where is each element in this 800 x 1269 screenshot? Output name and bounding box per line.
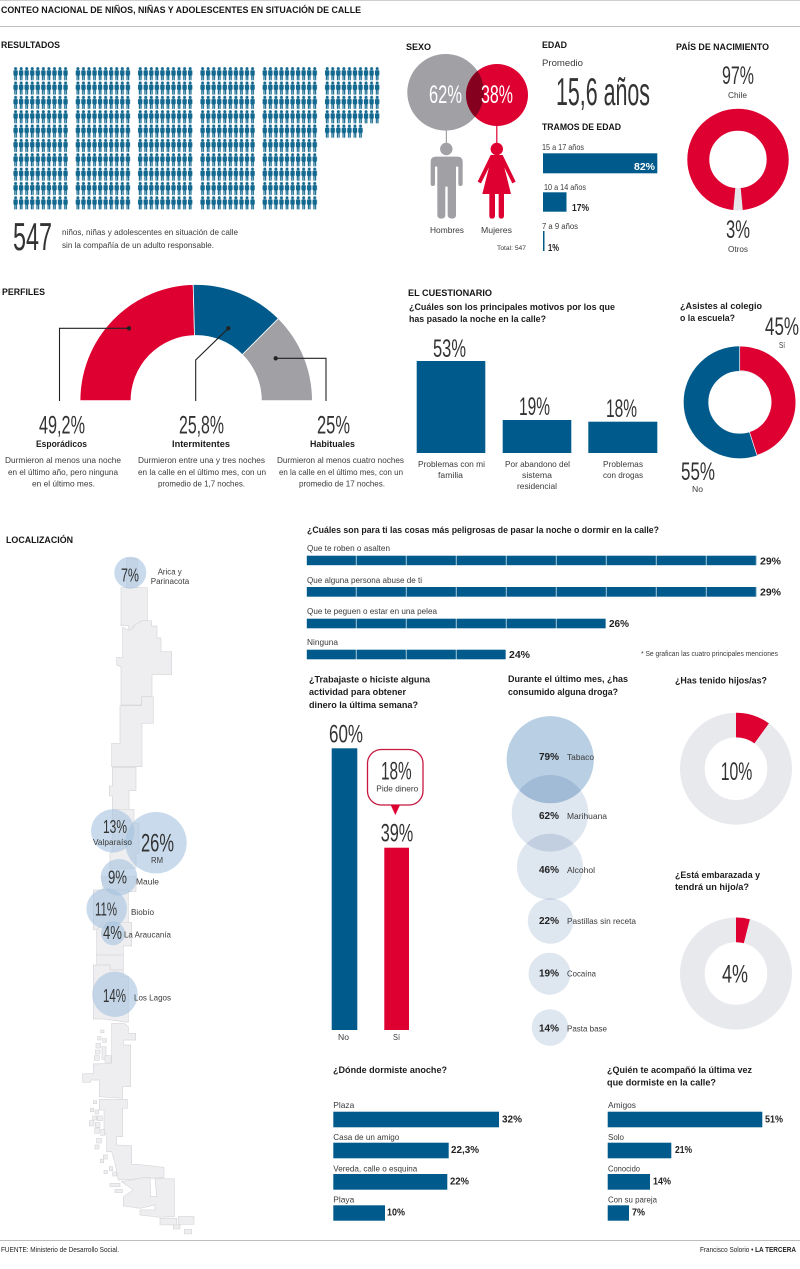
bar chart: quién te acompañó: 21% (675, 1144, 693, 1156)
bar chart: motivos: 53% (433, 335, 466, 363)
title: CONTEO NACIONAL DE NIÑOS, NIÑAS Y ADOLESCENTES EN SITUACIÓN DE CALLE (1, 4, 362, 16)
heading: sexo: SEXO (406, 42, 431, 53)
source: FUENTE: Ministerio de Desarrollo Social. (1, 1245, 119, 1254)
stat: 55% no (681, 458, 715, 494)
labels: regions: Valparaíso (93, 837, 132, 847)
bar chart: quién te acompañó (608, 1100, 784, 1221)
bar chart: quién te acompañó: 51% (765, 1114, 784, 1126)
panel: edad (542, 40, 657, 254)
callout: pide dinero: 18% (381, 757, 412, 785)
label: hombres: Hombres (430, 225, 464, 235)
panel: hijos (675, 675, 780, 812)
stat: 97% chile: Chile (728, 90, 747, 100)
labels: drogas: 14% (539, 1023, 560, 1035)
question: drogas: Durante el último mes, ¿has (508, 674, 628, 685)
labels: drogas: Cocaína (567, 969, 596, 979)
bar chart: peligros: Que te peguen o estar en una pelea (307, 606, 437, 616)
footer (0, 1240, 800, 1254)
profile: intermitentes: en la calle en el último mes, con un (138, 467, 266, 477)
question: trabajo: dinero la última semana? (309, 700, 418, 711)
bar: no (329, 721, 363, 1042)
question: motivos (409, 302, 615, 325)
profile: intermitentes: 25,8% (179, 411, 224, 439)
labels: regions: Maule (136, 876, 159, 886)
question: drogas (508, 674, 628, 698)
bar chart: quién te acompañó: Conocido (608, 1164, 640, 1174)
bar chart: age ranges (542, 142, 657, 254)
labels: drogas: Alcohol (567, 865, 595, 875)
heading: tramos: TRAMOS DE EDAD (542, 122, 621, 133)
heading: PAÍS DE NACIMIENTO (676, 41, 769, 53)
question: drogas: consumido alguna droga? (508, 687, 618, 698)
labels: regions: 11% (95, 899, 117, 920)
panel: asistes al colegio (680, 301, 799, 494)
panel: país de nacimiento (676, 41, 778, 254)
bar chart: dónde dormiste: Playa (333, 1195, 355, 1205)
callout: pide dinero (368, 750, 423, 815)
bar chart: age ranges: 10 a 14 años (544, 182, 586, 192)
bar chart: dónde dormiste (333, 1100, 523, 1221)
panel: trabajo (309, 675, 431, 1042)
profile: esporádicos (5, 411, 121, 488)
labels: regions: 13% (103, 816, 127, 837)
profile: habituales (277, 411, 404, 488)
profile: intermitentes: promedio de 1,7 noches. (158, 478, 245, 488)
profile: intermitentes: Intermitentes (172, 439, 230, 450)
labels: drogas: Tabaco (567, 752, 594, 762)
stat: 3% otros: 3% (726, 216, 750, 244)
text: description: niños, niñas y adolescentes en situación de calle (62, 227, 238, 237)
heading: resultados: RESULTADOS (1, 40, 61, 51)
donut chart: embarazada (692, 917, 780, 1017)
stat: 3% otros: Otros (728, 244, 748, 254)
panel: cosas más peligrosas (307, 525, 782, 661)
bar chart: quién te acompañó: 7% (632, 1206, 646, 1218)
donut chart: hijos: 10% (721, 758, 752, 786)
labels: regions: 9% (108, 867, 127, 888)
stat: 547: 547 (13, 216, 52, 259)
venn circles: 38% (481, 81, 513, 109)
bar chart: motivos: 19% (519, 393, 550, 421)
labels: drogas: 19% (539, 968, 560, 980)
labels: drogas: Marihuana (567, 811, 607, 821)
question: embarazada: ¿Está embarazada y (675, 870, 761, 881)
bar chart: quién te acompañó: Amigos (608, 1100, 636, 1110)
profile: esporádicos: Durmieron al menos una noche (5, 455, 121, 465)
labels: regions: Arica y (158, 567, 182, 577)
profile: intermitentes (138, 411, 266, 488)
donut chart: school (696, 346, 796, 455)
bar chart: motivos (417, 335, 657, 491)
profile: habituales: Durmieron al menos cuatro noches (277, 455, 404, 465)
question: embarazada (675, 870, 761, 893)
bar chart: age ranges: 1% (548, 242, 559, 254)
question: trabajo: actividad para obtener (309, 687, 406, 698)
bar chart: dónde dormiste: 22% (450, 1176, 470, 1188)
question: trabajo (309, 675, 431, 711)
bar chart: dónde dormiste: Vereda, calle o esquina (333, 1164, 417, 1174)
bar: si: 39% (381, 820, 413, 848)
profile: habituales: 25% (317, 411, 350, 439)
question: quién te acompañó (607, 1065, 752, 1088)
bar chart: peligros (307, 543, 782, 661)
labels: drogas (539, 751, 636, 1035)
venn circles: 62% (429, 81, 462, 109)
labels: drogas: 79% (539, 751, 560, 763)
labels: regions: 7% (121, 565, 139, 586)
bar chart: motivos: familia (438, 470, 463, 480)
bar chart: motivos: Por abandono del (505, 459, 570, 469)
bar chart: age ranges: 7 a 9 años (542, 221, 578, 231)
profile: esporádicos: Esporádicos (36, 439, 87, 450)
stat: 55% no: No (692, 484, 703, 494)
bar chart: peligros: Ninguna (307, 637, 338, 647)
bar chart: motivos: 18% (606, 395, 637, 423)
icon: woman (478, 126, 516, 219)
stat: 55% no: 55% (681, 458, 715, 486)
bar chart: quién te acompañó: Con su pareja (608, 1195, 657, 1205)
bar chart: dónde dormiste: Casa de un amigo (333, 1132, 400, 1142)
bar chart: dónde dormiste: 32% (502, 1114, 523, 1126)
stat: 45% si: Sí (779, 340, 785, 350)
stat: 97% chile (722, 62, 754, 100)
question: dónde dormiste: ¿Dónde dormiste anoche? (333, 1065, 447, 1076)
leader lines (60, 327, 326, 401)
question (680, 301, 762, 324)
panel: perfiles (2, 284, 404, 488)
panel: resultados (1, 40, 380, 259)
icon: man (431, 130, 463, 219)
labels: regions (93, 565, 189, 1006)
bar chart: peligros: 26% (609, 618, 630, 630)
bar chart: peligros: 24% (509, 649, 531, 661)
bar: no: No (338, 1032, 349, 1042)
panel: quién te acompañó (607, 1065, 784, 1221)
labels: regions: 14% (103, 985, 126, 1006)
bar: no: 60% (329, 721, 363, 749)
bar chart: age ranges: 82% (634, 161, 656, 173)
stat: 3% otros (726, 216, 750, 254)
question: quién te acompañó: ¿Quién te acompañó la última vez (607, 1065, 752, 1076)
bar chart: quién te acompañó: 14% (653, 1176, 672, 1188)
question: motivos: has pasado la noche en la calle? (409, 314, 546, 325)
labels: drogas: 62% (539, 810, 560, 822)
labels: regions: RM (151, 855, 163, 865)
labels: regions: Los Lagos (134, 993, 171, 1003)
bubbles: regions (86, 557, 187, 1017)
bar: si: Sí (393, 1032, 401, 1042)
bar chart: peligros: Que alguna persona abuse de ti (307, 575, 422, 585)
bar chart: peligros: 29% (760, 586, 782, 598)
question: peligros: ¿Cuáles son para ti las cosas más peligrosas de pasar la noche o dormir en la calle? (307, 525, 659, 536)
profile: intermitentes: Durmieron entre una y tres noches (138, 455, 265, 465)
heading: perfiles: PERFILES (2, 287, 46, 298)
heading: edad: EDAD (542, 40, 567, 51)
bar chart: motivos: Problemas con mi (418, 459, 485, 469)
bar chart: motivos: con drogas (603, 470, 643, 480)
pictogram: 547 figures (13, 67, 380, 210)
callout: pide dinero: Pide dinero (376, 784, 419, 794)
text: description (62, 227, 238, 250)
label: mujeres: Mujeres (481, 225, 512, 235)
bar chart: peligros: Que te roben o asalten (307, 543, 390, 553)
question: hijos: ¿Has tenido hijos/as? (675, 675, 767, 686)
question: o la escuela? (680, 313, 735, 324)
donut chart: embarazada: 4% (722, 960, 748, 988)
labels: regions: La Araucanía (124, 930, 171, 940)
panel: el cuestionario (408, 288, 657, 491)
bar chart: dónde dormiste: 10% (387, 1206, 406, 1218)
question: motivos: ¿Cuáles son los principales motivos por los que (409, 302, 615, 313)
donut chart: birth country (698, 120, 778, 210)
bar chart: quién te acompañó: Solo (608, 1132, 624, 1142)
stat: average age: 15,6 años (556, 71, 650, 114)
label: promedio: Promedio (542, 58, 583, 69)
bubble chart: drogas (507, 716, 594, 1046)
half donut chart (80, 284, 312, 401)
labels: drogas: 22% (539, 915, 560, 927)
bar chart: peligros: 29% (760, 556, 782, 568)
labels: drogas: Pastillas sin receta (567, 916, 636, 926)
profile: esporádicos: 49,2% (39, 411, 85, 439)
profile: habituales: promedio de 17 noches. (299, 478, 385, 488)
question: ¿Asistes al colegio (680, 301, 762, 312)
heading: el cuestionario: EL CUESTIONARIO (408, 288, 493, 299)
heading: localización: LOCALIZACIÓN (6, 534, 73, 546)
bar chart: age ranges: 15 a 17 años (542, 142, 584, 152)
question: quién te acompañó: que dormiste en la calle? (607, 1078, 716, 1088)
credit: Francisco Solorio • LA TERCERA (700, 1245, 797, 1254)
labels: drogas: Pasta base (567, 1024, 607, 1034)
labels: drogas: 46% (539, 864, 560, 876)
text: description: sin la compañía de un adulto responsable. (62, 240, 214, 250)
panel: dónde dormiste (333, 1065, 523, 1221)
labels: regions: Parinacota (151, 576, 189, 586)
stat: 97% chile: 97% (722, 62, 754, 90)
profile: habituales: en la calle en el último mes, con un (279, 467, 403, 477)
bar chart: dónde dormiste: Plaza (333, 1100, 355, 1110)
profile: esporádicos: en el último mes. (32, 478, 95, 488)
bar chart: motivos: Problemas (603, 459, 643, 469)
panel: drogas (507, 674, 636, 1046)
map of chile (83, 558, 194, 1234)
labels: regions: 26% (141, 830, 174, 858)
bar chart: motivos: sistema (522, 470, 552, 480)
profile: esporádicos: en el último año, pero ninguna (8, 467, 118, 477)
panel: embarazada (675, 870, 780, 1017)
bar chart: age ranges: 17% (572, 202, 590, 214)
bar chart: dónde dormiste: 22,3% (451, 1144, 480, 1156)
profile: habituales: Habituales (310, 439, 355, 450)
label: total: Total: 547 (497, 245, 526, 252)
labels: regions: Biobío (131, 907, 154, 917)
panel: sexo (406, 42, 528, 252)
question: embarazada: tendrá un hijo/a? (675, 882, 749, 893)
venn circles (407, 54, 528, 131)
labels: regions: 4% (103, 922, 122, 943)
bar chart: motivos: residencial (517, 481, 557, 491)
panel: localización (6, 534, 194, 1234)
bar: si (381, 820, 413, 1042)
question: trabajo: ¿Trabajaste o hiciste alguna (309, 675, 431, 686)
footnote: * Se grafican las cuatro principales menciones (641, 649, 778, 658)
